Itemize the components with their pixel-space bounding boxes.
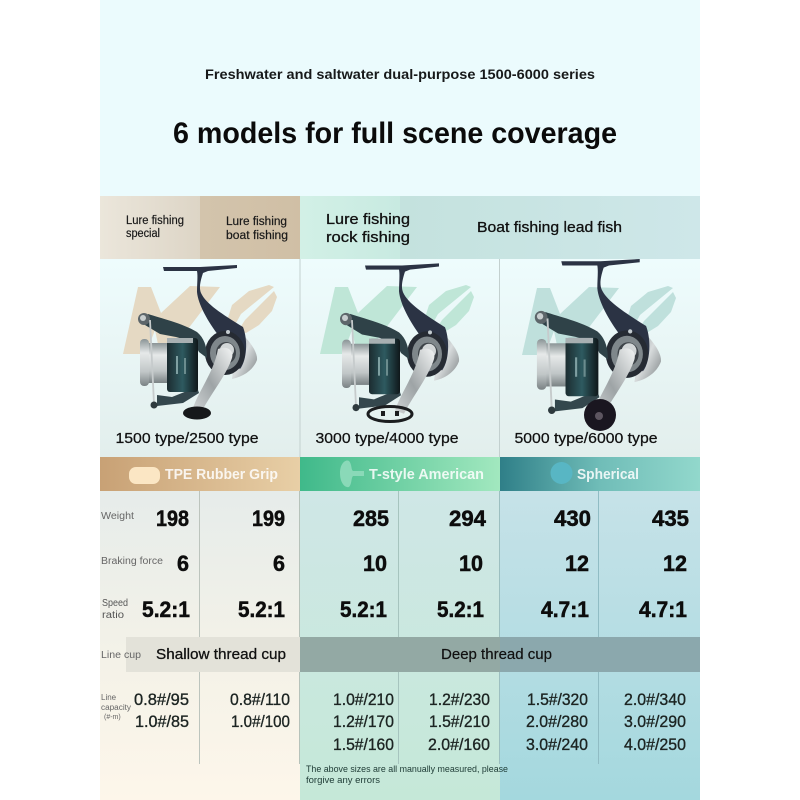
title: 6 models for full scene coverage	[173, 117, 617, 150]
row label: capacity	[101, 703, 131, 712]
row: weight: 435	[652, 506, 689, 531]
usage: lure fishing special: special	[126, 228, 160, 240]
usage: lure fishing rock fishing: Lure fishing	[326, 211, 410, 228]
row label: Line	[101, 693, 117, 702]
grip: spherical: Spherical	[577, 466, 639, 483]
column 5 capacity: 3.0#/240	[526, 735, 588, 754]
row: weight: 430	[554, 506, 591, 531]
panel: reel 2	[316, 263, 474, 447]
icon: rubber grip	[129, 467, 160, 484]
row: braking force: 6	[273, 551, 285, 576]
panel: usage header band	[100, 196, 700, 259]
column 3 capacity: 1.2#/170	[333, 712, 394, 731]
model label: 3000 type/4000 type	[316, 431, 458, 447]
row: speed ratio: 5.2:1	[238, 597, 285, 622]
row: line cup	[101, 637, 700, 672]
logo mark tan	[123, 285, 277, 354]
column 4 capacity	[428, 690, 490, 754]
row: speed ratio: 4.7:1	[541, 597, 589, 622]
row label: (#-m)	[104, 714, 121, 721]
usage: lure fishing boat fishing: Lure fishing	[226, 216, 287, 228]
row: weight: 294	[449, 506, 487, 531]
usage: boat fishing lead fish	[400, 196, 700, 259]
column 1 capacity: 0.8#/95	[134, 690, 189, 709]
grip: T-style	[300, 457, 500, 491]
row: weight: 285	[353, 506, 389, 531]
column 3 capacity	[333, 690, 394, 754]
column 4 capacity: 1.2#/230	[429, 690, 490, 709]
row: speed ratio: 5.2:1	[437, 597, 484, 622]
column 6 capacity: 4.0#/250	[624, 735, 686, 754]
panel: reel 3	[514, 259, 676, 447]
row: line capacity	[101, 690, 686, 754]
row label	[102, 598, 128, 621]
row: speed ratio: 4.7:1	[639, 597, 687, 622]
icon: spinning reel 5000/6000	[535, 259, 661, 431]
row: weight: 199	[252, 506, 285, 531]
subtitle: Freshwater and saltwater dual-purpose 1500-6000 series	[205, 66, 595, 82]
footnote: forgive any errors	[306, 775, 381, 785]
column 5 capacity: 2.0#/280	[526, 712, 588, 731]
usage: lure fishing rock fishing	[300, 196, 410, 259]
usage: boat fishing lead fish: Boat fishing lead fish	[477, 219, 622, 236]
deep label: Deep thread cup	[441, 646, 552, 663]
page background panel	[100, 0, 700, 800]
icon: spinning reel 1500/2500	[138, 265, 257, 420]
row: speed ratio	[102, 597, 687, 622]
column 6 capacity: 2.0#/340	[624, 690, 686, 709]
row: speed ratio: 5.2:1	[340, 597, 387, 622]
row label	[101, 693, 131, 721]
row: speed ratio: 5.2:1	[142, 597, 190, 622]
usage: lure fishing rock fishing: rock fishing	[326, 229, 410, 246]
row label: ratio	[102, 610, 124, 621]
grip: T-style: T-style American	[369, 466, 484, 483]
column 3 capacity: 1.0#/210	[333, 690, 394, 709]
column 3 capacity: 1.5#/160	[333, 735, 394, 754]
column 6 capacity: 3.0#/290	[624, 712, 686, 731]
column 5 capacity: 1.5#/320	[527, 690, 588, 709]
column 2 capacity: 1.0#/100	[231, 712, 290, 731]
logo mark teal	[522, 286, 676, 355]
usage: lure fishing boat fishing: boat fishing	[226, 230, 288, 242]
footnote	[306, 764, 508, 785]
usage: lure fishing special: Lure fishing	[126, 215, 184, 227]
footnote: The above sizes are all manually measured, please	[306, 764, 508, 774]
row label: Speed	[102, 598, 128, 609]
row: weight	[101, 506, 689, 531]
column 6 capacity	[624, 690, 686, 754]
row: braking force: 10	[363, 551, 387, 576]
row: braking force: 12	[565, 551, 589, 576]
band: shallow thread cup	[126, 637, 300, 672]
column 1 capacity	[134, 690, 189, 731]
model label: 5000 type/6000 type	[514, 431, 658, 447]
row label: Braking force	[101, 556, 163, 567]
column 2 capacity	[230, 690, 290, 731]
panel: handle grip band	[100, 457, 700, 491]
panel: product column backgrounds	[100, 259, 700, 800]
row label: Weight	[101, 511, 134, 522]
icon: spinning reel 3000/4000	[340, 263, 459, 422]
column 1 capacity: 1.0#/85	[135, 712, 189, 731]
logo mark green	[320, 285, 474, 354]
icon: spherical knob	[550, 462, 572, 484]
row: braking force: 10	[459, 551, 483, 576]
model label: 1500 type/2500 type	[116, 431, 258, 447]
shallow label: Shallow thread cup	[156, 646, 286, 663]
row: braking force	[101, 551, 687, 576]
panel: reel 1	[116, 265, 277, 447]
row label: Line cup	[101, 650, 141, 661]
band: deep thread cup	[300, 637, 500, 672]
column 5 capacity	[526, 690, 588, 754]
usage: lure fishing boat fishing	[200, 196, 300, 259]
grip: TPE rubber: TPE Rubber Grip	[165, 466, 278, 483]
column 4 capacity: 2.0#/160	[428, 735, 490, 754]
grip: spherical	[500, 457, 700, 491]
grip: TPE rubber	[100, 457, 300, 491]
row: weight: 198	[156, 506, 189, 531]
row: braking force: 12	[663, 551, 687, 576]
column 4 capacity: 1.5#/210	[429, 712, 490, 731]
usage: lure fishing special	[100, 196, 200, 259]
row: braking force: 6	[177, 551, 189, 576]
icon: T-style knob	[340, 460, 364, 487]
column 2 capacity: 0.8#/110	[230, 690, 290, 709]
